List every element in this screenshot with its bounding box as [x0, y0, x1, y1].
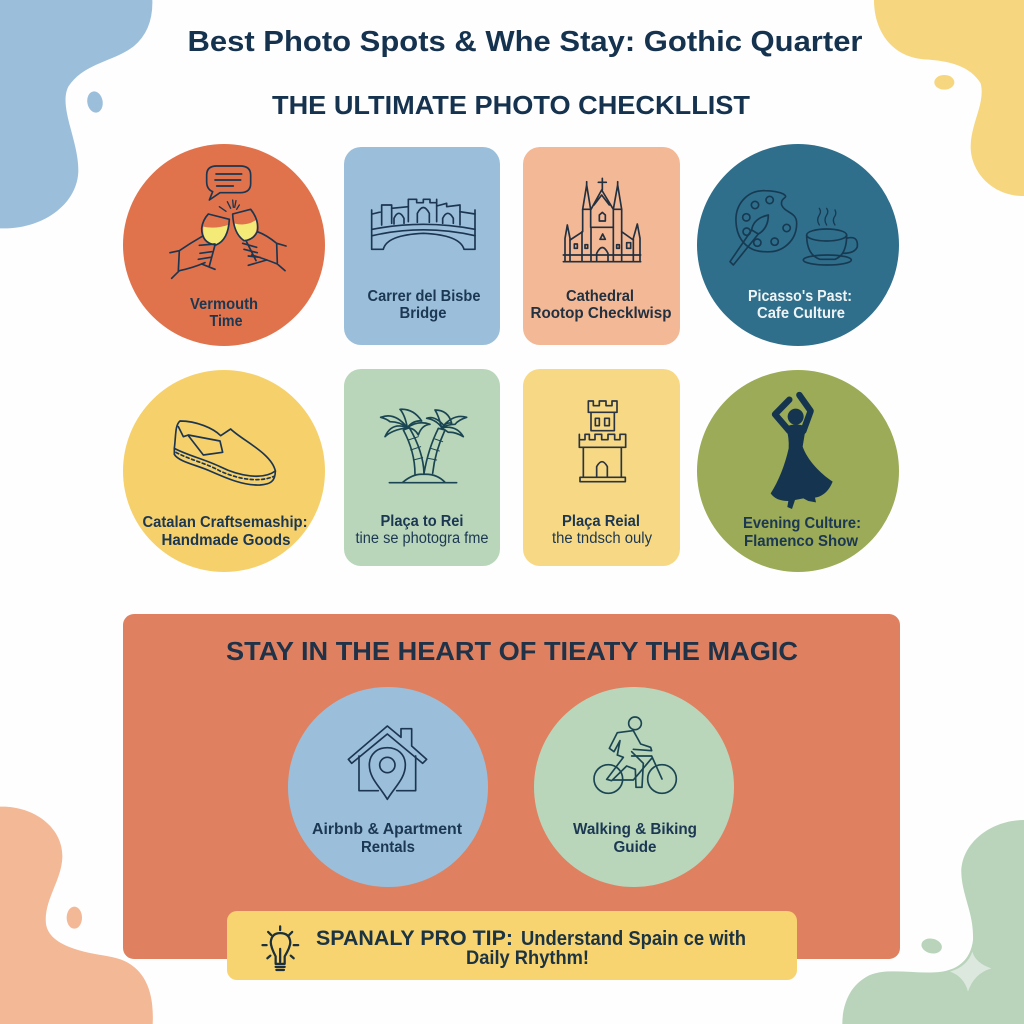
label: Cathedral Rootop Checklwisp — [530, 288, 672, 322]
card: Catalan Craftsemaship — [123, 370, 325, 572]
panel heading: STAY IN THE HEART OF TIEATY THE MAGIC — [226, 636, 798, 666]
card: Airbnb and Apartment Rentals — [288, 687, 488, 887]
label: Carrer del Bisbe Bridge — [368, 288, 481, 322]
label: Catalan Craftsemaship Handmade Goods — [142, 514, 308, 549]
tip text: Daily Rhythm! — [466, 948, 589, 969]
icon: flamenco dancer silhouette — [771, 395, 833, 509]
blob: bottom left peach — [0, 807, 153, 1024]
label: Cathedral Rootop Checklwisp: Rootop Checklwisp — [530, 305, 672, 322]
label: Carrer del Bisbe Bridge: Carrer del Bisbe — [368, 288, 481, 305]
label: Vermouth Time: Vermouth — [190, 296, 258, 313]
icon: house with map pin — [348, 726, 427, 799]
label: Plaça Reial — [552, 513, 652, 547]
label: Vermouth Time — [190, 296, 258, 330]
icon: espadrille shoe — [174, 421, 275, 485]
icon: castle tower — [579, 401, 626, 482]
card: Cathedral Rootop Checklwisp — [523, 147, 680, 345]
blob: top left blue — [0, 0, 152, 228]
label: Evening Culture Flamenco Show — [743, 515, 861, 550]
icon: light bulb — [262, 926, 298, 970]
card: Walking and Biking Guide — [534, 687, 734, 887]
icon: palette and coffee cup — [730, 191, 857, 265]
label: Walking and Biking Guide: Guide — [614, 839, 657, 856]
blob: bottom right green — [842, 820, 1024, 1024]
label: Airbnb and Apartment Rentals — [312, 821, 462, 856]
label: Picasso's Past Cafe Culture: Cafe Culture — [757, 305, 845, 322]
tip text: Understand Spain ce with — [521, 928, 746, 950]
callout: pro tip — [227, 911, 797, 980]
label: Airbnb and Apartment Rentals: Airbnb & Apartment — [312, 821, 462, 838]
card: Vermouth Time — [123, 144, 325, 346]
label: Evening Culture Flamenco Show: Flamenco Show — [744, 533, 859, 550]
card: Evening Culture Flamenco Show — [697, 370, 899, 572]
label: Walking and Biking Guide — [573, 821, 697, 856]
tip text — [316, 927, 746, 969]
card: Carrer del Bisbe Bridge — [344, 147, 500, 345]
label: Plaça Reial: Plaça Reial — [562, 513, 640, 530]
icon: palm trees — [381, 409, 467, 483]
icon: bridge — [372, 199, 475, 249]
title: Best Photo Spots & Whe Stay: Gothic Quarter — [188, 26, 862, 58]
tip text: SPANALY PRO TIP: — [316, 927, 513, 950]
icon: toasting glasses with speech bubble — [170, 166, 286, 278]
card: Plaça Reial — [523, 369, 680, 566]
label: Picasso's Past Cafe Culture: Picasso's Past: — [748, 288, 852, 305]
panel: stay section — [123, 614, 900, 959]
checklist heading: THE ULTIMATE PHOTO CHECKLLIST — [272, 90, 750, 120]
label: Plaça to Rei: tine se photogra fme — [356, 530, 488, 547]
card: Plaça to Rei — [344, 369, 500, 566]
icon: person riding a bike — [594, 717, 676, 793]
label: Picasso's Past Cafe Culture — [748, 288, 852, 322]
label: Vermouth Time: Time — [210, 313, 243, 330]
label: Evening Culture Flamenco Show: Evening Culture: — [743, 515, 861, 532]
label: Airbnb and Apartment Rentals: Rentals — [361, 839, 415, 856]
label: Plaça to Rei: Plaça to Rei — [380, 513, 464, 530]
blob: top right yellow — [874, 0, 1024, 196]
label: Catalan Craftsemaship Handmade Goods: Handmade Goods — [162, 532, 290, 549]
label: Carrer del Bisbe Bridge: Bridge — [400, 305, 447, 322]
card: Picasso's Past Cafe Culture — [697, 144, 899, 346]
label: Plaça to Rei — [356, 513, 488, 547]
label: Catalan Craftsemaship Handmade Goods: Catalan Craftsemaship: — [142, 514, 308, 531]
label: Plaça Reial: the tndsch ouly — [552, 530, 652, 547]
label: Cathedral Rootop Checklwisp: Cathedral — [566, 288, 634, 305]
label: Walking and Biking Guide: Walking & Biking — [573, 821, 697, 838]
icon: cathedral — [563, 178, 641, 262]
